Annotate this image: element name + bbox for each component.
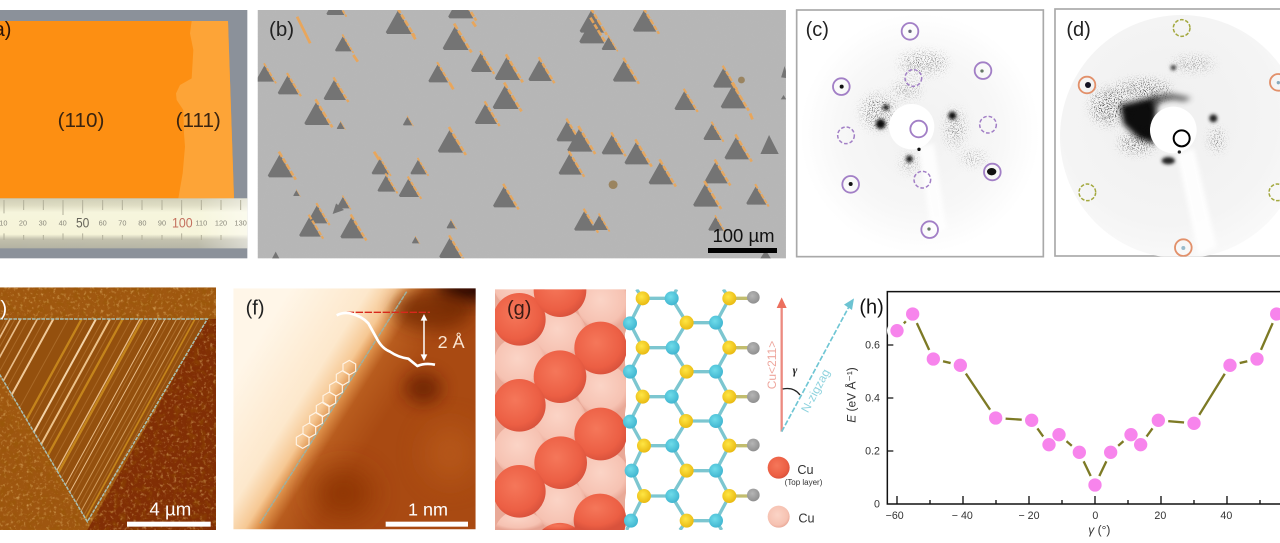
copper atoms (495, 289, 626, 530)
dashed green rings (1079, 20, 1280, 201)
scale bar 1 nm (386, 500, 468, 527)
legend: Cu (768, 506, 815, 528)
solid purple rings (833, 23, 1001, 238)
panel (f): STM image (233, 288, 476, 530)
panel (a): copper foil photo (0, 10, 247, 258)
x tick labels: −60 (886, 510, 904, 522)
y axis title: E (eV Å⁻¹) (843, 367, 858, 423)
ruler: 120 (215, 219, 227, 228)
y tick labels: 0.6 (865, 340, 880, 352)
arrow N-zigzag (782, 302, 852, 432)
hexagon chain (296, 360, 356, 448)
y tick labels: 0.2 (865, 446, 880, 458)
panel (e): AFM image (0, 287, 216, 530)
scale bar 100 µm (708, 225, 777, 253)
label (g): (g) (507, 298, 531, 320)
ruler: 20 (19, 219, 27, 228)
x axis title: γ (°) (1088, 523, 1110, 537)
y tick labels: 0.4 (865, 393, 880, 405)
label 2 Å: 2 Å (438, 332, 465, 352)
beam stop (1150, 107, 1197, 153)
ruler (0, 198, 247, 248)
dashed triangle outline (0, 319, 207, 522)
height profile (337, 313, 435, 366)
beam stop (889, 104, 934, 149)
y tick labels (865, 340, 880, 511)
scale bar 1 nm: 1 nm (408, 500, 448, 520)
panel (b): SEM image of triangular crystals (256, 0, 788, 260)
legend: Cu top layer (768, 457, 823, 487)
orange rings (1079, 74, 1280, 256)
data markers (890, 307, 1280, 492)
panel (h): energy chart (843, 292, 1280, 537)
x tick labels: 0 (1092, 510, 1098, 522)
x tick labels (886, 510, 1232, 522)
ruler: 80 (138, 219, 146, 228)
dark scattering (1120, 97, 1157, 144)
double arrow (423, 320, 425, 354)
arrow N-zigzag: N-zigzag (798, 367, 833, 415)
ruler: 130 (235, 219, 247, 228)
ruler: 40 (59, 219, 67, 228)
data line (897, 314, 1277, 485)
nitride lattice (623, 289, 760, 530)
striped triangle interior (0, 319, 207, 522)
step edge line (260, 292, 407, 523)
black ring (1174, 130, 1190, 146)
axes frame (887, 292, 1280, 504)
ruler: 50 (76, 215, 90, 231)
lighter Cu(111) region (176, 21, 234, 198)
panel (c): diffraction pattern (797, 10, 1043, 257)
panel (g): atomic model (493, 257, 852, 530)
speckle clouds (862, 53, 985, 172)
arrow Cu<211>: Cu<211> (765, 341, 779, 389)
x tick labels: − 20 (1018, 510, 1040, 522)
x tick labels: 20 (1154, 510, 1166, 522)
scale bar 4 µm: 4 µm (149, 499, 191, 520)
orange Cu(110) foil (0, 21, 234, 198)
arrow Cu<211> (765, 297, 787, 432)
angle gamma: γ (793, 365, 798, 377)
scale bar 4 µm (127, 499, 211, 527)
bright spots (840, 30, 996, 231)
legend: Cu: Cu (798, 512, 815, 526)
ruler: 90 (158, 219, 166, 228)
ruler: 70 (118, 219, 126, 228)
label (d): (d) (1066, 19, 1091, 41)
x tick labels: − 40 (952, 510, 973, 522)
label (h): (h) (859, 296, 884, 318)
label (f): (f) (246, 297, 265, 319)
red dashed reference (346, 312, 430, 313)
ruler: 30 (39, 219, 47, 228)
y tick labels: 0 (874, 499, 880, 511)
legend: Cu top layer: Cu (797, 463, 814, 477)
ruler: 60 (99, 219, 107, 228)
scale bar 100 µm: 100 µm (712, 225, 775, 246)
N-zigzag arrow head (844, 298, 854, 310)
ruler: 110 (195, 219, 207, 228)
label (b): (b) (269, 18, 294, 41)
legend: Cu top layer: (Top layer) (785, 478, 823, 487)
panel (d): diffraction pattern (1055, 9, 1280, 258)
dashed purple rings (838, 70, 996, 188)
angle gamma (783, 365, 800, 395)
label (c): (c) (806, 19, 829, 41)
x tick labels: 40 (1220, 510, 1232, 522)
label (110): (110) (58, 109, 104, 132)
triangular domains (256, 0, 788, 260)
label (111): (111) (176, 109, 221, 132)
ruler: 100 (172, 215, 193, 231)
marker halos (887, 304, 1280, 495)
